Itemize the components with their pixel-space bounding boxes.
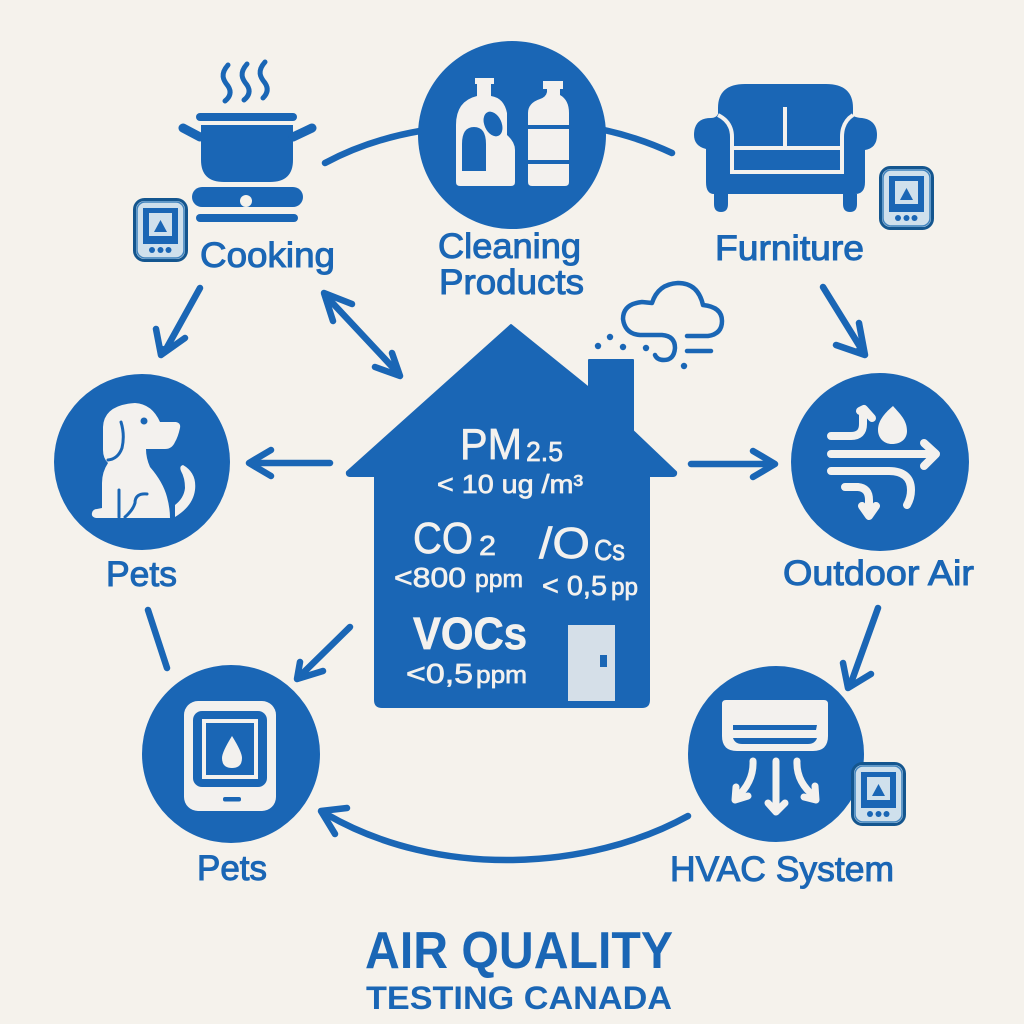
door xyxy=(568,625,615,701)
metric: PM2.5: < 10 ug /m³ xyxy=(437,469,583,499)
arrow: house to monitor xyxy=(297,627,350,679)
metric: /OCs: pp xyxy=(611,574,638,601)
icon: hvac circle xyxy=(688,666,864,842)
icon: monitor near cooking xyxy=(134,200,186,260)
arrow: cooking to pets xyxy=(156,288,200,355)
label: Cleaning Products: Products xyxy=(439,263,584,302)
label: Furniture: Furniture xyxy=(715,229,864,268)
metric: PM2.5: PM xyxy=(460,420,522,469)
steam xyxy=(223,62,267,101)
icon: cooking pot xyxy=(183,62,312,222)
title: TESTING CANADA xyxy=(366,980,672,1016)
icon: pets dog circle xyxy=(54,374,230,550)
icon: outdoor air circle xyxy=(791,373,969,551)
connector lines and arrows xyxy=(148,130,878,860)
line: pets to monitor xyxy=(148,610,167,668)
metric: CO2: <800 xyxy=(394,562,466,593)
water drop xyxy=(878,406,907,444)
label: HVAC System: HVAC System xyxy=(670,850,894,889)
label: Pets: Pets xyxy=(106,555,177,594)
icon: sofa xyxy=(694,84,877,212)
label: Pets (monitor): Pets xyxy=(197,849,267,888)
metric: CO2 xyxy=(394,514,523,593)
metric: PM2.5 xyxy=(437,420,583,499)
arrow: house to outdoor air xyxy=(691,451,775,477)
tail xyxy=(175,465,195,517)
metric: VOCs: ppm xyxy=(476,662,527,689)
icon: monitor near furniture xyxy=(880,168,932,228)
title: AIR QUALITY xyxy=(365,922,673,980)
label: Cleaning Products xyxy=(438,227,584,302)
arrow: house to pets xyxy=(249,450,330,476)
label: Cleaning Products: Cleaning xyxy=(438,227,581,266)
icon: monitor near hvac xyxy=(852,764,904,824)
metric: /OCs xyxy=(539,519,638,601)
curve: cleaning to furniture xyxy=(604,130,672,153)
metric: CO2: ppm xyxy=(475,566,523,593)
curve: cooking to cleaning xyxy=(325,131,420,163)
bottle xyxy=(528,81,569,186)
icon: cleaning products circle xyxy=(418,41,606,229)
arrow: furniture to outdoor air xyxy=(823,287,865,355)
detergent jug xyxy=(456,78,515,186)
dog silhouette xyxy=(92,403,180,518)
title xyxy=(365,922,673,1016)
metric: /OCs: Cs xyxy=(594,535,625,567)
metric: /OCs: /O xyxy=(539,519,590,568)
metric: CO2: 2 xyxy=(479,530,496,561)
icon: monitor circle xyxy=(142,665,320,843)
icon: cloud and smoke xyxy=(595,283,722,369)
house silhouette xyxy=(347,325,676,707)
metric: /OCs: < 0,5 xyxy=(542,570,607,601)
arrow: outdoor air to hvac xyxy=(843,608,878,688)
metric: PM2.5: 2.5 xyxy=(526,436,563,467)
label: Outdoor Air: Outdoor Air xyxy=(783,554,974,593)
arrow: hvac to monitor curve xyxy=(321,808,688,860)
panel: central house xyxy=(347,325,676,707)
label: Cooking: Cooking xyxy=(200,236,335,275)
arrow: cooking and house double xyxy=(323,292,401,377)
metric: VOCs: <0,5 xyxy=(406,658,473,689)
metric: CO2: CO xyxy=(413,514,473,563)
metric: VOCs xyxy=(406,608,527,689)
metric: VOCs: VOCs xyxy=(413,608,527,659)
